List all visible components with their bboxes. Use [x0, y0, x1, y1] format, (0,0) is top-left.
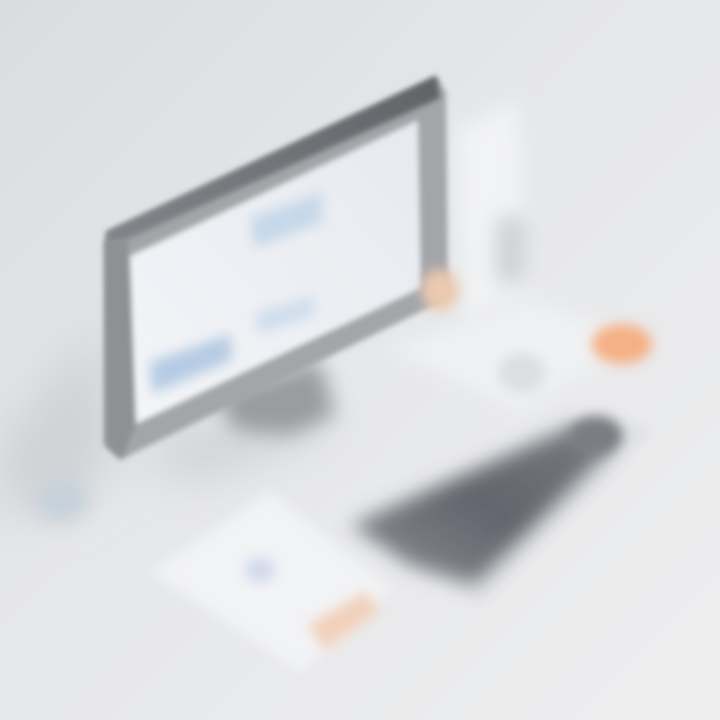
keyboard	[345, 412, 655, 605]
screen chart: lower middle blue block	[256, 296, 314, 334]
monitor	[104, 76, 448, 460]
paper blue mark	[245, 557, 275, 583]
monitor screen	[130, 120, 421, 424]
monitor frame	[104, 76, 448, 460]
keyboard end	[569, 416, 623, 456]
orange button	[592, 324, 652, 364]
paper orange mark	[308, 592, 380, 650]
paper sheet	[152, 492, 392, 672]
screen chart: upper blue block	[250, 192, 322, 248]
monitor top bezel	[106, 76, 440, 246]
blue floor mark	[36, 478, 88, 522]
screen chart: lower left blue block	[150, 334, 232, 394]
monitor left bezel	[104, 240, 136, 458]
desk card	[390, 300, 640, 410]
card grey dial	[498, 353, 546, 393]
monitor stand	[215, 360, 335, 435]
keyboard dark top	[352, 425, 610, 585]
paper document	[152, 492, 392, 672]
panel: tall translucent glass behind monitor	[455, 100, 528, 320]
monitor shadow	[0, 320, 340, 510]
keyboard light base	[345, 412, 655, 605]
orange accent on monitor edge	[421, 269, 459, 311]
